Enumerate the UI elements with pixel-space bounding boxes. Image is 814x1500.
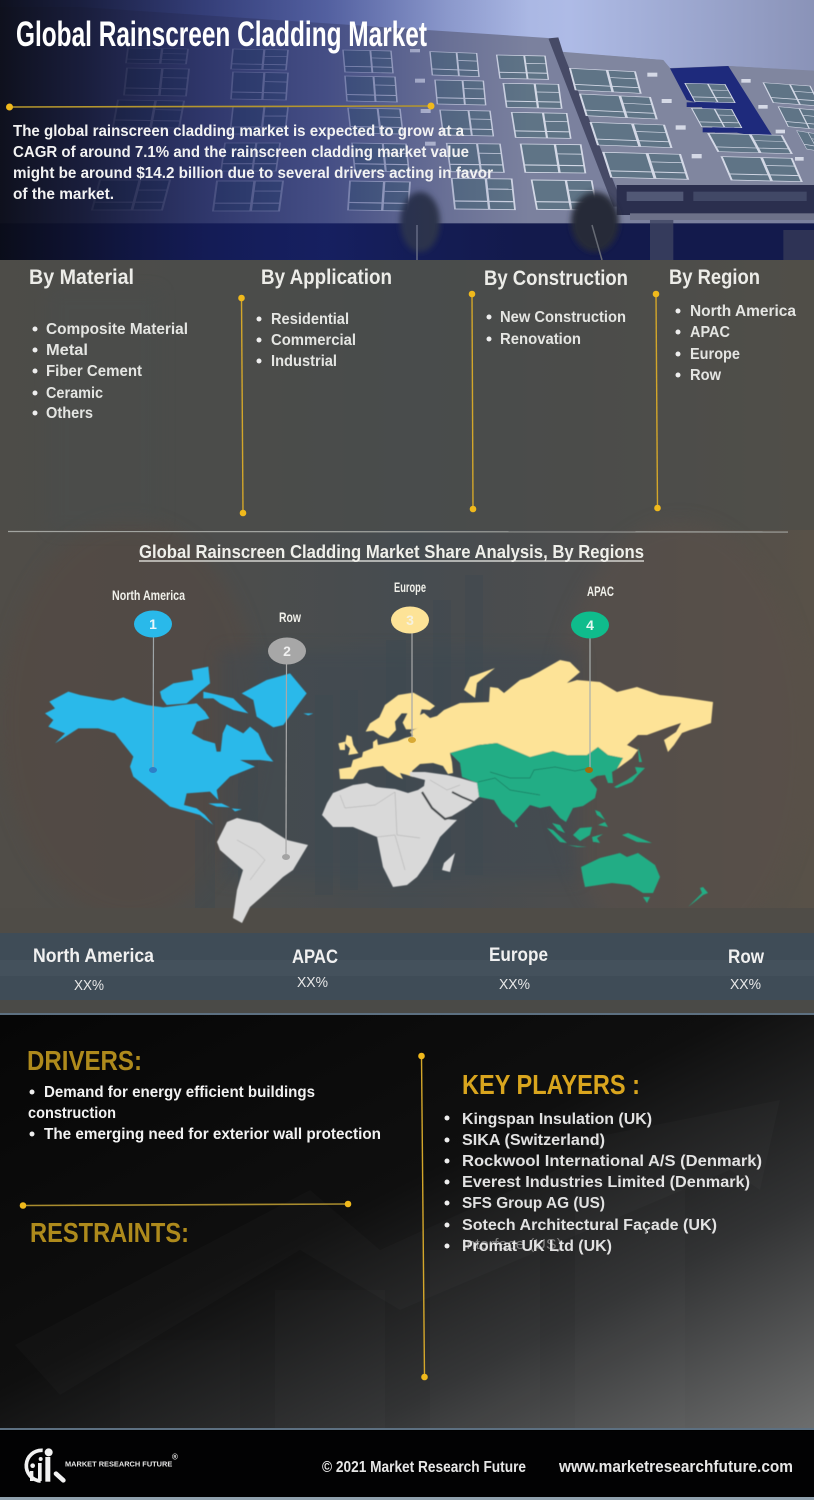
share: north america: XX% xyxy=(74,977,104,994)
region: north america xyxy=(45,667,313,825)
panel: by region: Europe xyxy=(690,346,740,363)
intro paragraph xyxy=(13,123,493,203)
divider: application xyxy=(238,295,246,516)
marker: north america xyxy=(112,587,185,773)
panel: by region: North America xyxy=(690,303,796,320)
divider: construction xyxy=(469,291,476,512)
panel: by application xyxy=(256,266,392,370)
marker: row: 2 xyxy=(283,643,291,659)
panel: dark lower section xyxy=(0,1015,814,1430)
intro paragraph: The global rainscreen cladding market is expected to grow at a xyxy=(13,123,464,140)
icon: logo xyxy=(26,1448,178,1482)
icon: logo: MARKET RESEARCH FUTURE xyxy=(65,1460,172,1469)
panel: by material: Ceramic xyxy=(46,385,103,402)
website: www.marketresearchfuture.com xyxy=(558,1458,793,1476)
region: rest of world xyxy=(217,772,479,923)
panel: by construction: Renovation xyxy=(500,331,581,348)
wall vents xyxy=(410,49,804,161)
region: asia pacific xyxy=(450,743,708,907)
key players list: Everest Industries Limited (Denmark) xyxy=(462,1174,750,1191)
drivers heading: DRIVERS: xyxy=(27,1045,142,1076)
marker: apac: APAC xyxy=(587,583,614,599)
marker: row: Row xyxy=(279,609,301,625)
share: north america: North America xyxy=(33,946,154,967)
marker: europe: 3 xyxy=(406,612,414,628)
panel: by material: Metal xyxy=(46,342,88,359)
marker: row xyxy=(268,609,306,860)
panel: by region xyxy=(669,266,796,384)
share: row: XX% xyxy=(730,976,761,993)
panel: by application: Residential xyxy=(271,311,349,328)
header divider with gold dots xyxy=(6,102,434,110)
share: north america xyxy=(33,946,154,994)
map heading: Global Rainscreen Cladding Market Share Analysis, By Regions xyxy=(139,542,644,562)
panel: by construction: New Construction xyxy=(500,309,626,326)
panel: by region: By Region xyxy=(669,266,760,289)
drivers list: Demand for energy efficient buildings xyxy=(44,1084,315,1101)
marker: europe xyxy=(391,579,429,743)
key players list: Rockwool International A/S (Denmark) xyxy=(462,1153,762,1170)
vertical divider xyxy=(418,1053,428,1380)
copyright: © 2021 Market Research Future xyxy=(322,1459,526,1476)
world map xyxy=(45,660,713,923)
panel: by construction: By Construction xyxy=(484,267,628,290)
key players list: Sotech Architectural Façade (UK) xyxy=(462,1217,717,1234)
key players list: Kingspan Insulation (UK) xyxy=(462,1111,652,1128)
panel: by material xyxy=(29,266,188,422)
drivers list xyxy=(28,1084,381,1143)
share: europe: Europe xyxy=(489,945,548,966)
share: row xyxy=(728,947,764,993)
share: apac xyxy=(292,947,338,991)
drivers list: The emerging need for exterior wall protection xyxy=(44,1126,381,1143)
marker: europe: Europe xyxy=(394,579,426,595)
key players heading: KEY PLAYERS : xyxy=(462,1069,640,1100)
share: europe: XX% xyxy=(499,976,530,993)
drivers list: construction xyxy=(28,1105,116,1122)
marker: apac xyxy=(571,583,614,773)
panel: footer xyxy=(0,1431,814,1500)
marker: apac: 4 xyxy=(586,617,594,633)
window grid xyxy=(430,52,479,77)
panel: by region: Row xyxy=(690,367,722,384)
title: Global Rainscreen Cladding Market xyxy=(16,15,427,54)
panel: by material: By Material xyxy=(29,266,134,289)
panel: by material: Composite Material xyxy=(46,321,188,338)
marker: north america: North America xyxy=(112,587,185,603)
intro paragraph: might be around $14.2 billion due to several drivers acting in favor xyxy=(13,165,493,182)
intro paragraph: of the market. xyxy=(13,186,114,203)
panel: by application: By Application xyxy=(261,266,392,289)
panel: by application: Commercial xyxy=(271,332,356,349)
intro paragraph: CAGR of around 7.1% and the rainscreen cladding market value xyxy=(13,144,469,161)
panel: by material: Fiber Cement xyxy=(46,363,143,380)
building facade xyxy=(0,7,814,260)
panel: by region: APAC xyxy=(690,324,730,341)
panel: header with building photo xyxy=(0,0,814,260)
key players list: SIKA (Switzerland) xyxy=(462,1132,605,1149)
key players list: Promat UK Ltd (UK) xyxy=(462,1238,612,1255)
panel: by application: Industrial xyxy=(271,353,337,370)
region: europe and russia xyxy=(338,660,713,779)
key players list: Interface (US) xyxy=(462,1236,562,1253)
marker: north america: 1 xyxy=(149,616,157,632)
icon: logo: ® xyxy=(172,1453,178,1462)
panel: by material: Others xyxy=(46,405,93,422)
trees xyxy=(400,192,619,252)
left windows xyxy=(343,50,393,73)
divider: region xyxy=(653,291,661,511)
share: row: Row xyxy=(728,947,764,968)
panel: middle background xyxy=(0,260,814,1015)
share: europe xyxy=(489,945,548,993)
share: apac: APAC xyxy=(292,947,338,968)
drivers divider xyxy=(20,1201,351,1209)
key players list xyxy=(444,1111,762,1255)
key players list: SFS Group AG (US) xyxy=(462,1195,605,1212)
share: apac: XX% xyxy=(297,974,328,991)
restraints heading: RESTRAINTS: xyxy=(30,1217,189,1248)
panel: by construction xyxy=(484,267,628,348)
